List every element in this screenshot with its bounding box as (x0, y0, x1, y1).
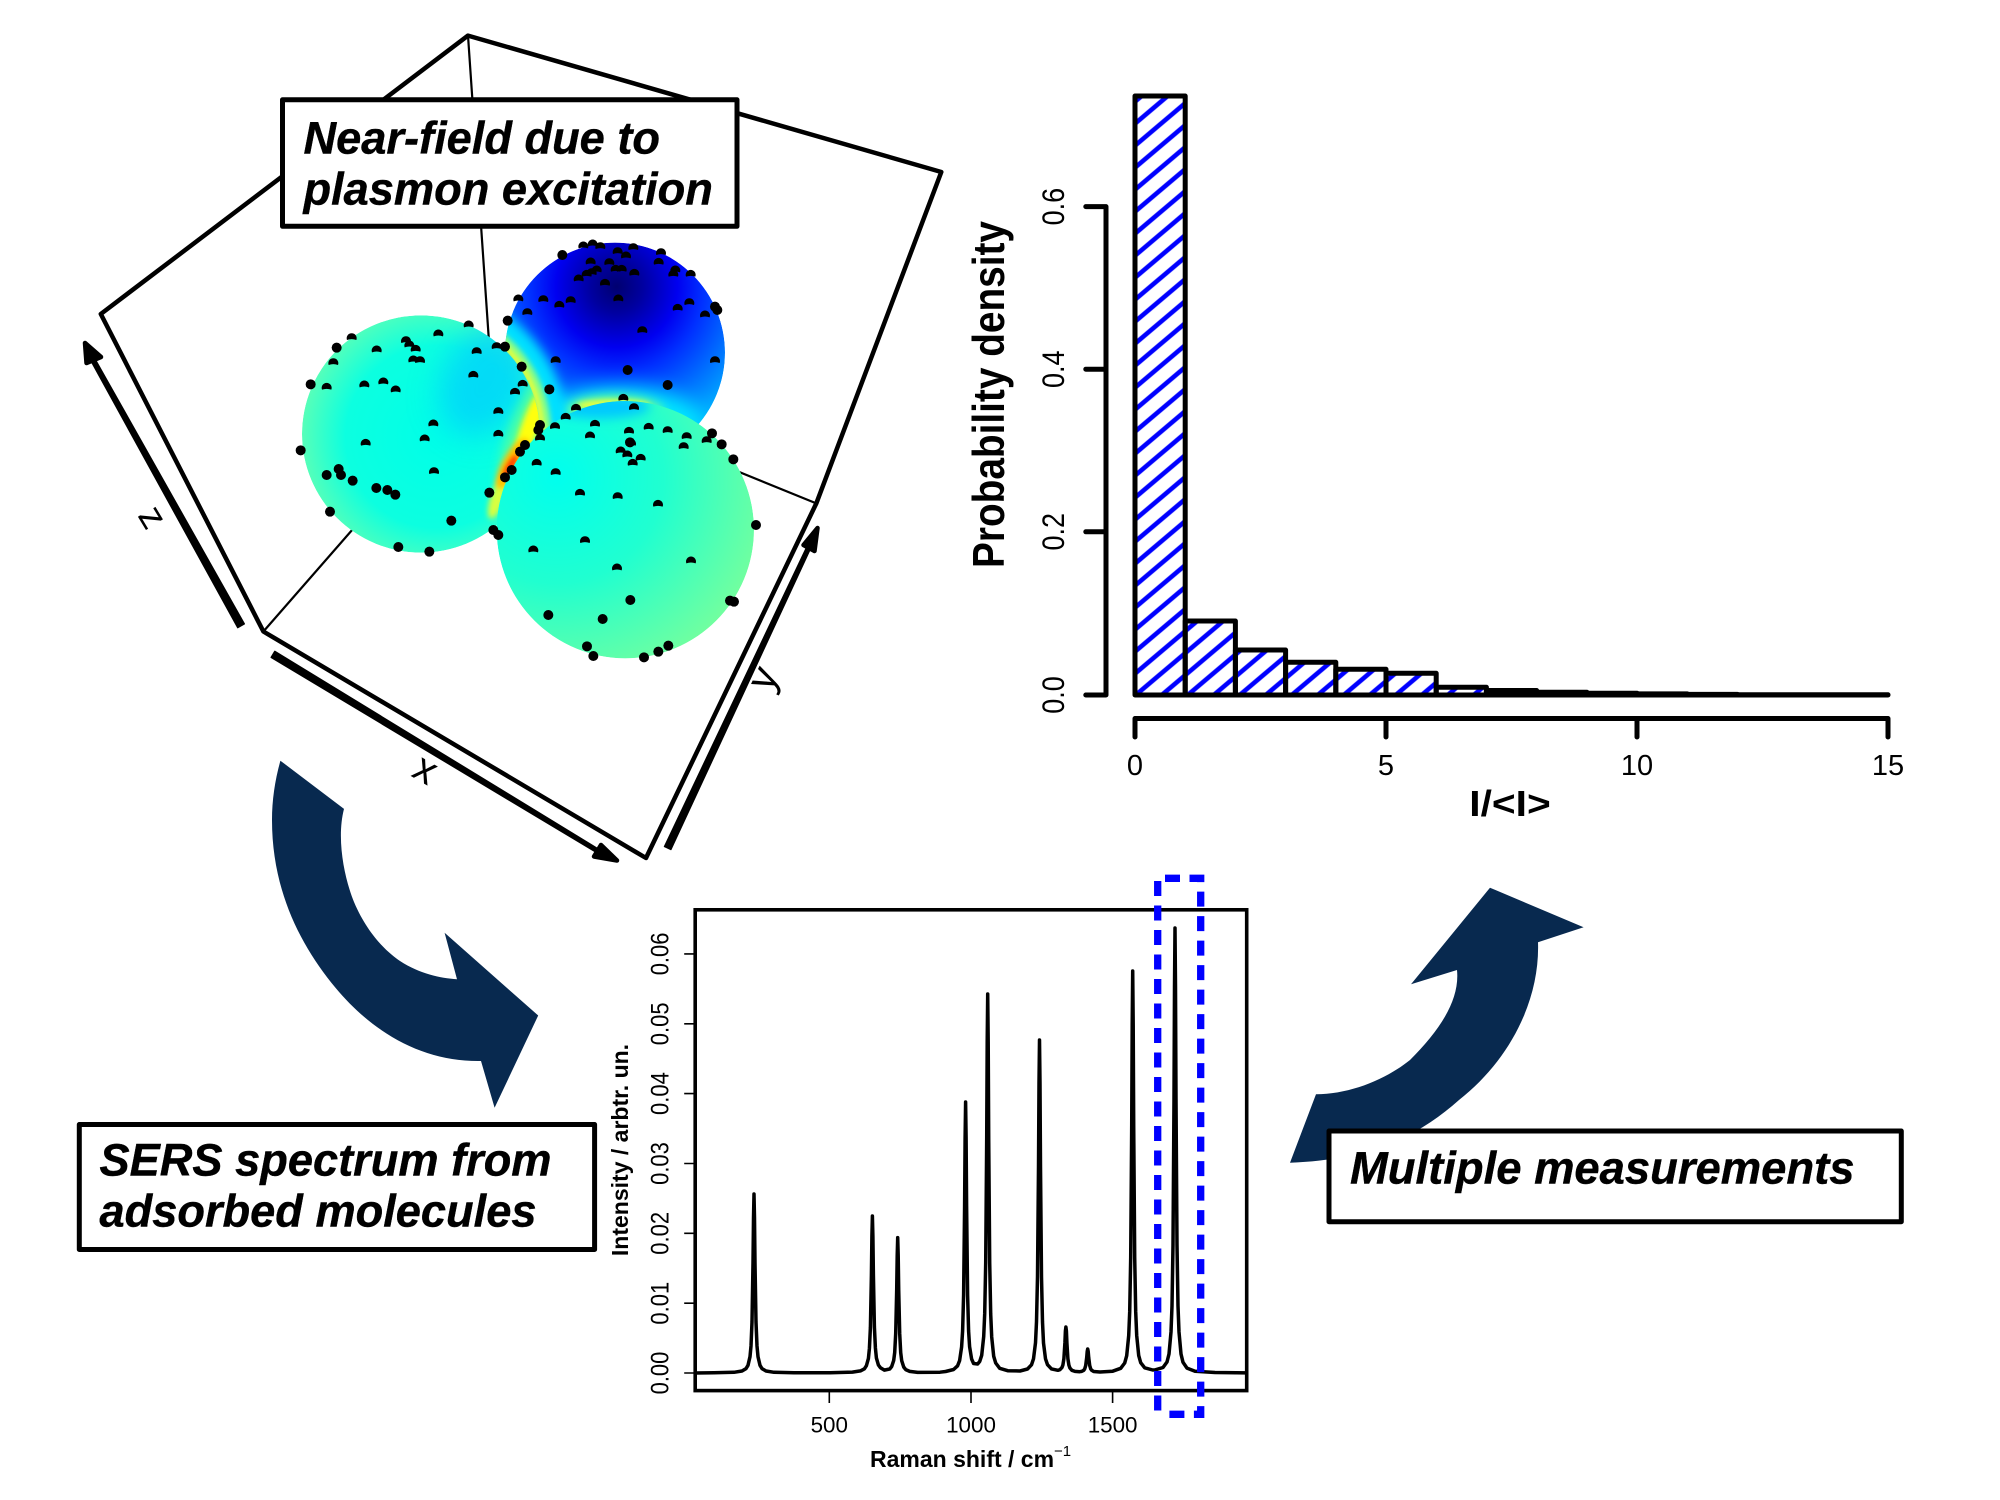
spectrum y title: Intensity / arbtr. un. (607, 1044, 633, 1256)
callout: near-field (282, 100, 737, 226)
spectrum y ticks and labels: 0.04 (646, 1072, 674, 1115)
y axis arrow (664, 528, 818, 850)
callout: near-field: plasmon excitation (302, 163, 713, 214)
x axis arrow (271, 651, 617, 860)
histogram of intensity (964, 96, 1904, 824)
y axis label: y (737, 659, 788, 697)
callout: SERS spectrum: SERS spectrum from (100, 1135, 552, 1186)
spectrum y ticks and labels: 0.02 (646, 1212, 674, 1255)
callout: near-field: Near-field due to (304, 112, 660, 163)
callout: SERS spectrum: adsorbed molecules (100, 1185, 536, 1236)
histogram bars (1135, 96, 1888, 695)
spectrum y ticks and labels: 0.01 (646, 1282, 674, 1325)
spectrum y ticks and labels: 0.03 (646, 1142, 674, 1185)
histogram y axis: 0.0 (1036, 676, 1072, 714)
spectrum x title: Raman shift / cm (870, 1446, 1054, 1472)
histogram y title: Probability density (964, 221, 1014, 568)
SERS spectrum chart (607, 878, 1247, 1472)
spectrum x ticks and labels (811, 1391, 1138, 1438)
sphere: left, cyan (302, 315, 540, 553)
sphere: front, cyan-green (497, 395, 754, 658)
histogram x axis (1127, 718, 1904, 782)
adsorbed molecules: black dots (296, 240, 761, 662)
dashed highlight on selected peak (1158, 878, 1201, 1414)
sphere: back, blue (506, 242, 725, 431)
spectrum x title: −1 (1054, 1443, 1071, 1460)
histogram x title: I/<I> (1469, 784, 1551, 824)
spectrum x ticks and labels: 1500 (1088, 1413, 1138, 1438)
histogram y axis (1036, 188, 1106, 714)
curved arrow: to spectrum (272, 761, 538, 1108)
z axis arrow (85, 343, 244, 628)
spectrum y ticks and labels (646, 932, 695, 1394)
z axis label: z (129, 498, 175, 536)
spectrum x ticks and labels: 500 (811, 1413, 848, 1438)
callout: SERS spectrum (79, 1124, 595, 1250)
x axis label: x (406, 744, 447, 794)
spectrum y ticks and labels: 0.06 (646, 932, 674, 975)
nanoparticle trimer with near-field colouring (289, 240, 761, 662)
callout: multiple measurements (1329, 1131, 1901, 1222)
spectrum x ticks and labels: 1000 (946, 1413, 996, 1438)
histogram y axis: 0.4 (1036, 350, 1072, 388)
histogram x axis: 5 (1378, 750, 1394, 782)
spectrum y ticks and labels: 0.05 (646, 1002, 674, 1045)
histogram x axis: 15 (1872, 750, 1904, 782)
curved arrow: to histogram (1290, 888, 1584, 1163)
spectrum curve (695, 928, 1247, 1373)
histogram y axis: 0.6 (1036, 188, 1072, 225)
histogram x axis: 0 (1127, 750, 1143, 782)
histogram x axis: 10 (1621, 750, 1653, 782)
3D bounding box (101, 36, 941, 858)
spectrum frame (695, 910, 1247, 1391)
callout: multiple measurements: Multiple measurements (1350, 1142, 1854, 1193)
spectrum y ticks and labels: 0.00 (646, 1352, 674, 1394)
histogram y axis: 0.2 (1036, 513, 1072, 551)
